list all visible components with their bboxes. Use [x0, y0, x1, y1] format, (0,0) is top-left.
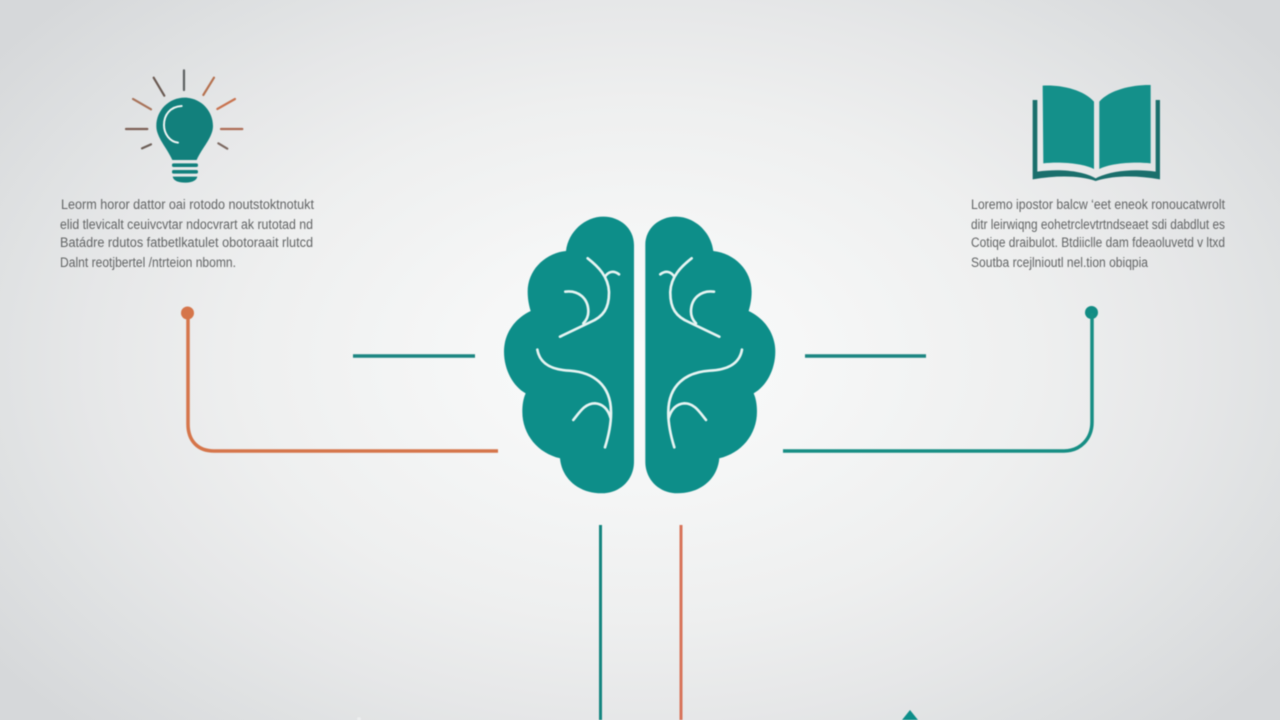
right hemisphere: [645, 217, 775, 493]
text block: left description: [60, 197, 314, 270]
icon: open book: [1033, 85, 1160, 181]
icon: teal triangle cut off at bottom edge: [902, 710, 918, 720]
text block: left description: Leorm horor dattor oai rotodo noutstoktnotukt: [61, 197, 314, 212]
connector: orange elbow with dot: [181, 306, 498, 451]
text block: right description: Loremo ipostor balcw ‘eet eneok ronoucatwrolt: [971, 197, 1225, 212]
connector: bottom orange vertical line: [680, 525, 682, 720]
left hemisphere: [504, 217, 634, 493]
small faint mark at bottom edge: [357, 717, 361, 720]
text block: right description: [971, 197, 1225, 270]
connector: bottom teal vertical line: [599, 525, 602, 720]
text block: right description: ditr leirwiqng eohetrclevtrtndseaet sdi dabdlut es: [971, 217, 1225, 232]
text block: left description: elid tlevicalt ceuivcvtar ndocvrart ak rutotad nd: [60, 217, 313, 232]
text block: right description: Soutba rcejlnioutl nel.tion obiqpia: [971, 255, 1148, 270]
icon: brain: [504, 217, 775, 493]
connector: teal elbow with dot: [783, 306, 1098, 451]
text block: right description: Cotiqe draibulot. Btdiiclle dam fdeaoluvetd v ltxd: [971, 235, 1225, 250]
text block: left description: Batádre rdutos fatbetlkatulet obotoraait rlutcd: [60, 235, 313, 250]
icon: light bulb: [126, 70, 242, 183]
connector: left short teal line: [353, 354, 475, 358]
text block: left description: Dalnt reotjbertel /ntrteion nbomn.: [60, 255, 236, 270]
connector: right short teal line: [805, 354, 926, 358]
